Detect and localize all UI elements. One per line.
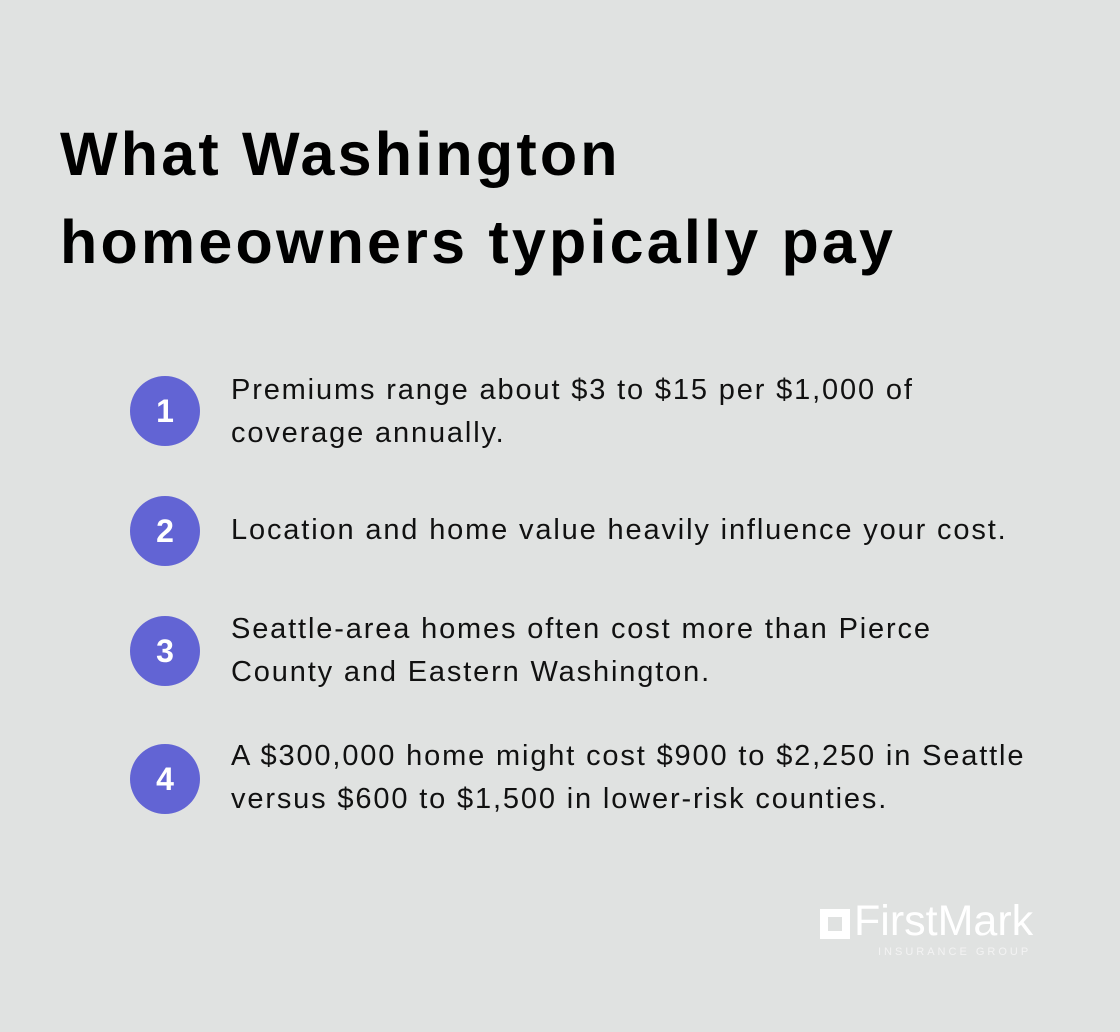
text 3: Seattle-area homes often cost more than Pierce: [231, 613, 932, 645]
logo: FirstMark: [854, 897, 1033, 945]
text 4: versus $600 to $1,500 in lower-risk counties.: [231, 783, 888, 815]
text 4: A $300,000 home might cost $900 to $2,250 in Seattle: [231, 740, 1025, 772]
text 1: coverage annually.: [231, 417, 506, 449]
icon: number 4: [130, 744, 200, 814]
icon: number 2: [130, 496, 200, 566]
text 1: [231, 374, 914, 449]
icon: number 1: 1: [156, 393, 174, 429]
logo: [820, 897, 1033, 958]
icon: number 2: 2: [156, 513, 174, 549]
icon: number 3: [130, 616, 200, 686]
title: What Washington: [60, 120, 621, 188]
text 4: [231, 740, 1025, 815]
text 1: Premiums range about $3 to $15 per $1,000 of: [231, 374, 914, 406]
text 3: [231, 613, 932, 688]
icon: number 1: [130, 376, 200, 446]
title: [60, 120, 896, 276]
text 3: County and Eastern Washington.: [231, 656, 711, 688]
title: homeowners typically pay: [60, 208, 896, 276]
icon: number 3: 3: [156, 633, 174, 669]
text 2: Location and home value heavily influence your cost.: [231, 514, 1008, 546]
logo: INSURANCE GROUP: [878, 946, 1031, 958]
icon: number 4: 4: [156, 761, 174, 797]
